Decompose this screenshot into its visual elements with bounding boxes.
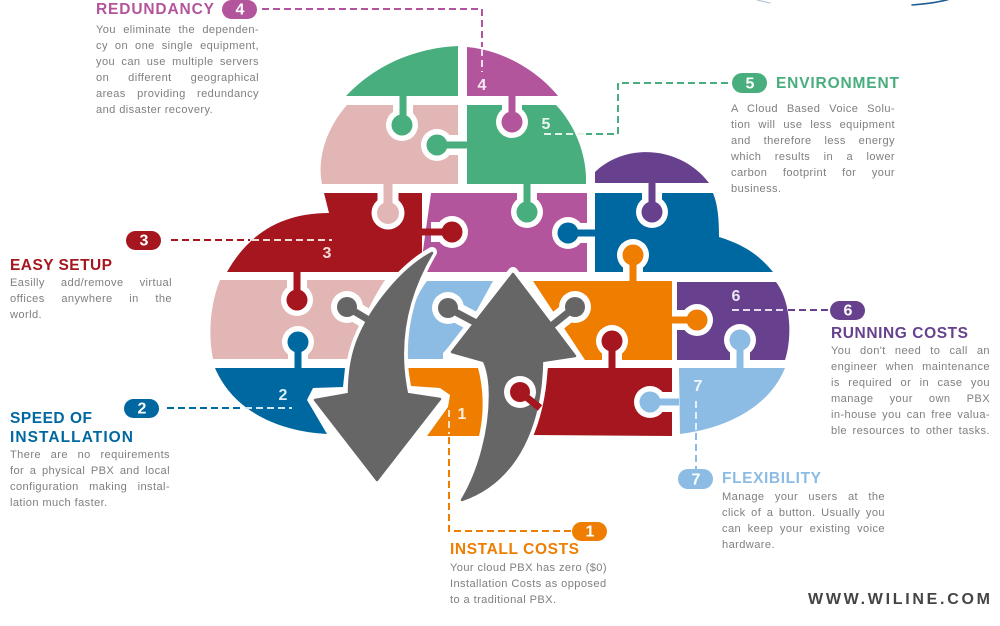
number 5: 5	[542, 116, 551, 133]
text: install costs: Installation Costs as opposed	[450, 578, 607, 590]
text: running costs: manage your own PBX	[831, 393, 990, 405]
text: redundancy: cy on one single equipment,	[96, 40, 259, 52]
text: redundancy: areas providing redundancy	[96, 88, 259, 100]
piece: orange centre	[533, 281, 672, 360]
cropped artwork at top edge	[757, 0, 950, 5]
text: flexibility	[722, 491, 885, 551]
website url: WWW.WILINE.COM	[808, 591, 990, 608]
text: running costs: You don't need to call an	[831, 345, 990, 357]
callout 1: install costs	[449, 406, 607, 558]
badge 2	[124, 399, 159, 418]
knob: green into magenta	[511, 184, 543, 228]
text: speed of installation: There are no requirements	[10, 449, 170, 461]
text: redundancy: You eliminate the dependen-	[96, 24, 259, 36]
knob: pink into red	[372, 184, 404, 230]
piece: purple top	[595, 152, 709, 183]
callout 7: flexibility	[678, 378, 822, 489]
badge 3: 3	[140, 232, 149, 250]
callout 5: environment	[542, 73, 900, 134]
text: flexibility: hardware.	[722, 539, 775, 551]
text: running costs	[831, 345, 990, 437]
knob: light blue into red	[634, 386, 679, 418]
knob: red into pink	[281, 272, 313, 316]
knob: green into pink	[386, 96, 418, 141]
knob: green into pink sideways	[421, 129, 467, 161]
text: running costs: engineer when maintenance	[831, 361, 990, 373]
piece: purple right	[677, 282, 789, 360]
knob: magenta into green	[496, 96, 528, 138]
callout 3: easy setup	[10, 231, 332, 274]
callout 4: redundancy	[96, 0, 487, 94]
text: flexibility: click of a button. Usually you	[722, 507, 885, 519]
piece: dark red upper	[227, 193, 422, 272]
knob: orange into purple	[672, 304, 713, 336]
piece: green right	[467, 105, 586, 184]
number 7: 7	[694, 378, 703, 395]
badge 7: 7	[692, 472, 701, 488]
connector 7	[695, 401, 697, 470]
callout 6: running costs	[732, 288, 968, 342]
connector 4	[262, 9, 482, 72]
text: install costs: Your cloud PBX has zero ($0)	[450, 562, 607, 574]
text: environment: which results in a lower	[731, 151, 895, 163]
knob: red into up arrow	[504, 376, 540, 408]
arrow: grey down arrow	[313, 252, 442, 482]
piece: magenta top	[467, 47, 558, 96]
connector 5	[542, 83, 728, 134]
text: redundancy: you can use multiple servers	[96, 56, 259, 68]
connector 1	[449, 410, 572, 531]
knob: red into orange	[596, 325, 628, 368]
text: redundancy: and disaster recovery.	[96, 104, 213, 116]
heading: running costs: RUNNING COSTS	[831, 325, 968, 342]
badge 2: 2	[138, 400, 147, 418]
text: running costs: in-house you can free valua-	[831, 409, 990, 421]
heading: speed of installation	[10, 410, 133, 446]
knob: orange into blue	[617, 239, 649, 281]
badge 1: 1	[586, 524, 595, 540]
text: speed of installation: for a physical PBX and local	[10, 465, 170, 477]
callout 2: speed of installation	[10, 387, 292, 446]
badge 6	[830, 301, 865, 320]
text: install costs: to a traditional PBX.	[450, 594, 556, 606]
knob: blue into magenta	[552, 217, 595, 249]
connector 2	[167, 407, 292, 409]
arrow: grey up arrow	[432, 272, 591, 502]
piece: green top	[346, 46, 458, 96]
heading: environment: ENVIRONMENT	[776, 75, 900, 92]
text: speed of installation: lation much faster.	[10, 497, 108, 509]
text: flexibility: can keep your existing voice	[722, 523, 885, 535]
badge 4: 4	[236, 2, 245, 18]
number 4: 4	[478, 77, 487, 94]
badge 6: 6	[844, 302, 853, 320]
text: redundancy: on different geographical	[96, 72, 259, 84]
piece: magenta centre	[420, 193, 587, 272]
piece: pink upper	[321, 105, 458, 184]
text: install costs	[450, 562, 607, 606]
badge 5: 5	[746, 76, 755, 92]
text: environment: and therefore less energy	[731, 135, 895, 147]
heading: easy setup: EASY SETUP	[10, 257, 112, 274]
number 2: 2	[279, 387, 288, 404]
text: flexibility: Manage your users at the	[722, 491, 885, 503]
text: easy setup	[10, 277, 172, 321]
text: speed of installation	[10, 449, 170, 509]
knob: blue into pink	[282, 326, 314, 368]
cloud puzzle pieces	[210, 46, 789, 436]
connector 3	[171, 239, 332, 241]
text: environment: business.	[731, 183, 781, 195]
text: redundancy	[96, 24, 259, 116]
knob: light blue into purple	[724, 324, 756, 368]
badge 4	[222, 0, 257, 19]
piece: light blue lower right	[679, 368, 785, 434]
heading: install costs: INSTALL COSTS	[450, 541, 579, 558]
text: environment: A Cloud Based Voice Solu-	[731, 103, 895, 115]
piece: pink middle	[210, 280, 385, 359]
piece: orange lower	[408, 368, 483, 436]
piece: dark red lower	[530, 368, 672, 436]
heading: speed of installation: SPEED OF	[10, 410, 92, 427]
piece: dark blue right	[595, 193, 773, 272]
text: speed of installation: configuration making instal-	[10, 481, 170, 493]
knob: purple into blue	[636, 183, 668, 228]
piece: light blue middle	[407, 281, 493, 359]
text: easy setup: Easilly add/remove virtual	[10, 277, 172, 289]
knob: red into magenta	[422, 216, 468, 248]
text: easy setup: world.	[10, 309, 42, 321]
puzzle knobs	[281, 96, 756, 418]
text: environment: tion will use less equipment	[731, 119, 895, 131]
text: easy setup: offices anywhere in the	[10, 293, 172, 305]
heading: flexibility: FLEXIBILITY	[722, 470, 822, 487]
connector 6	[732, 309, 830, 311]
badge 5	[732, 73, 767, 93]
text: running costs: is required or in case you	[831, 377, 990, 389]
number 3: 3	[323, 245, 332, 262]
number 6: 6	[732, 288, 741, 305]
badge 7	[678, 469, 713, 489]
text: environment: carbon footprint for your	[731, 167, 895, 179]
text: running costs: ble resources to other tasks.	[831, 425, 990, 437]
number 1: 1	[458, 406, 467, 423]
text: environment	[731, 103, 895, 195]
heading: speed of installation: INSTALLATION	[10, 429, 133, 446]
heading: redundancy: REDUNDANCY	[96, 1, 215, 18]
badge 1	[572, 522, 607, 541]
piece: blue lower left	[215, 368, 345, 434]
badge 3	[126, 231, 161, 250]
